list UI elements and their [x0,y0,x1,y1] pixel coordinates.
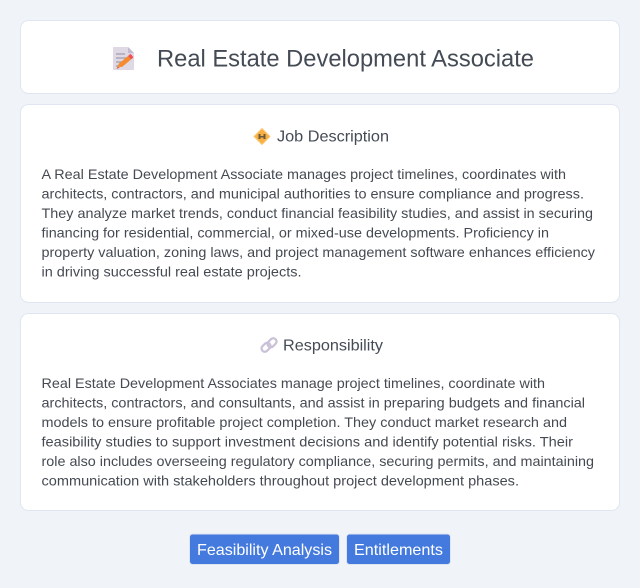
job description text: financing for residential, commercial, or mixed-use developments. Proficiency in [42,224,549,240]
icon: diamond road sign [254,128,270,144]
responsibility text [42,375,594,488]
panel: title [20,20,620,94]
panel: job description [20,104,620,302]
icon: chain link [260,337,278,353]
tag: entitlements: Entitlements [354,542,443,559]
job description text [42,166,595,280]
job description text: They analyze market trends, conduct financial feasibility studies, and assist in securing [42,205,593,221]
responsibility text: feasibility studies to support investment decisions and identify potential risks. Their [42,434,573,450]
responsibility text: role also includes overseeing regulatory compliance, securing permits, and maintaining [42,453,594,469]
job description text: property valuation, zoning laws, and project management software enhances efficiency [42,244,595,260]
heading: job description: Job Description [277,128,389,146]
panel: responsibility [20,314,620,510]
job description text: in driving successful real estate projects. [42,264,302,280]
tag: entitlements [346,534,450,564]
responsibility text: architects, contractors, and consultants, and assist in preparing budgets and financial [42,394,585,410]
heading: responsibility: Responsibility [283,338,383,354]
responsibility text: models to ensure profitable project completion. They conduct market research and [42,414,567,430]
title text: Real Estate Development Associate [157,46,534,72]
icon: document with pencil [113,47,134,70]
responsibility text: communication with stakeholders throughout project development phases. [42,472,519,488]
tag: feasibility analysis: Feasibility Analysis [197,542,332,559]
responsibility text: Real Estate Development Associates manage project timelines, coordinate with [42,375,545,391]
job description text: architects, contractors, and municipal authorities to ensure compliance and progress. [42,186,584,202]
tag: feasibility analysis [190,534,340,564]
job description text: A Real Estate Development Associate manages project timelines, coordinates with [42,166,566,182]
